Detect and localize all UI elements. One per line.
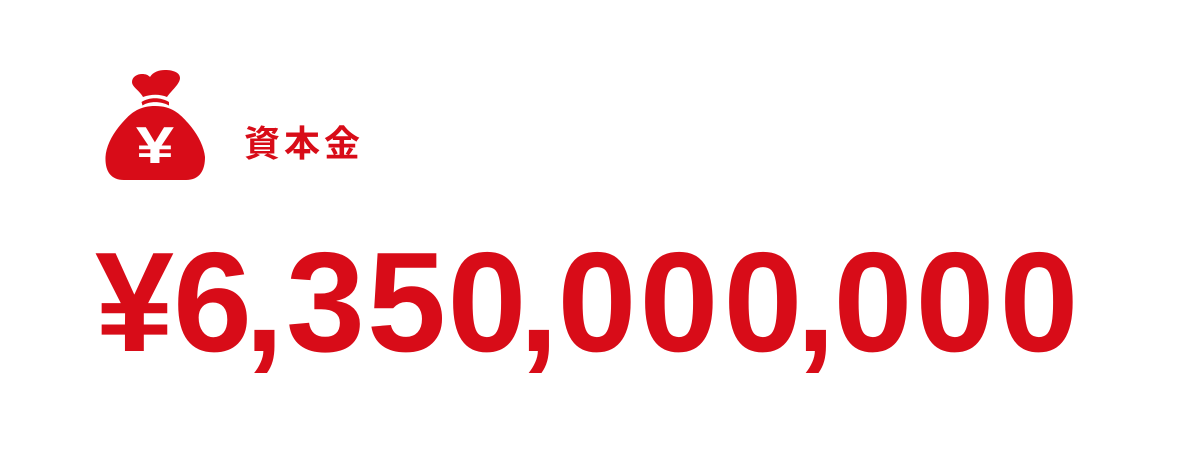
label: capital: 資本金 (244, 123, 364, 164)
icon: money bag with yen sign (105, 70, 205, 180)
icon: money bag with yen sign: ¥ (136, 116, 174, 174)
amount: ¥6,350,000,000 (95, 223, 1078, 382)
